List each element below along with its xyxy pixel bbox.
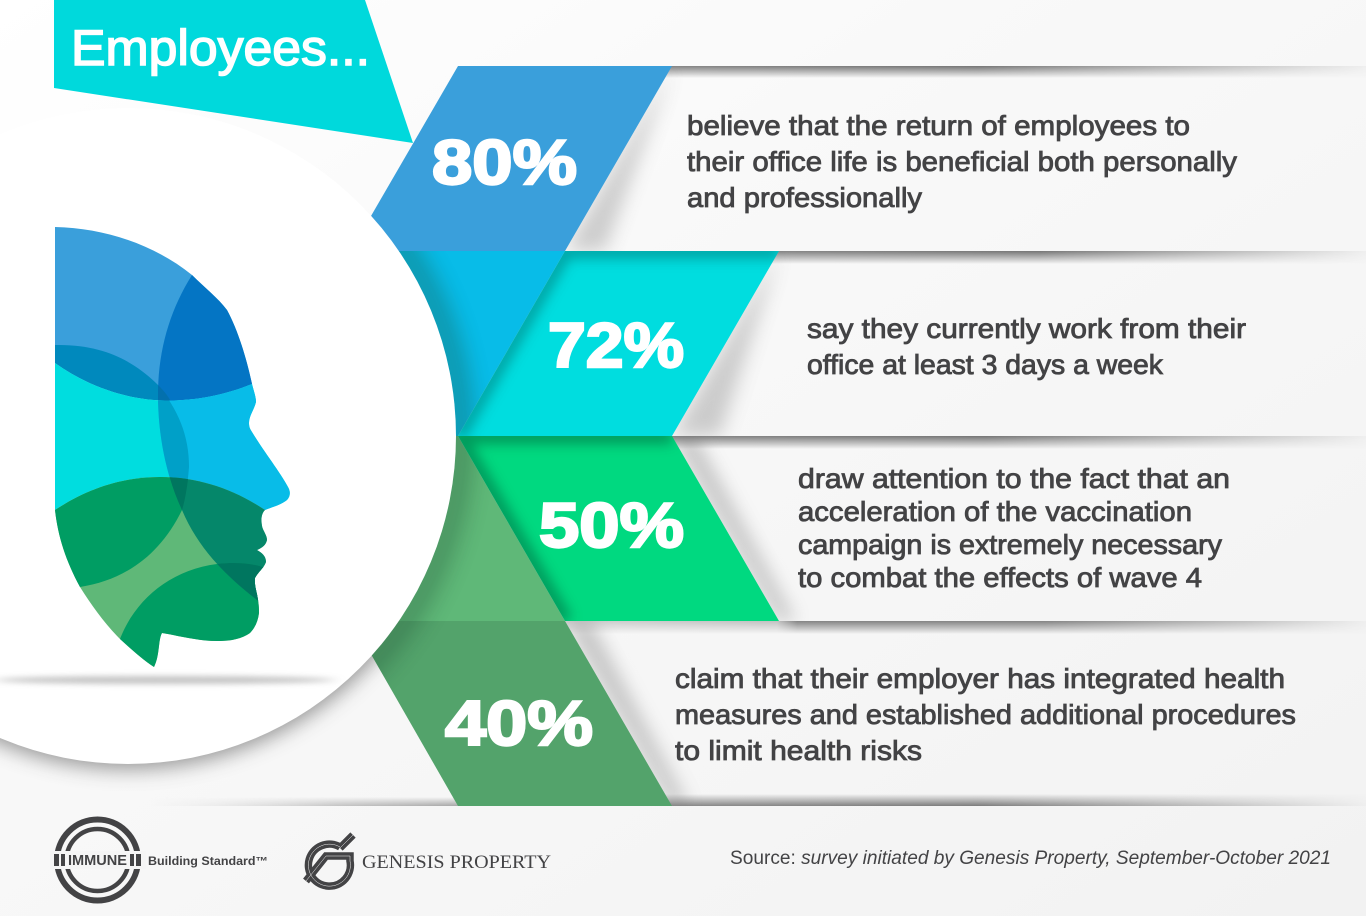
logo: Genesis Property: GENESIS PROPERTY [362, 852, 551, 873]
text: vaccination campaign: campaign is extremely necessary [798, 529, 1222, 560]
floor shadow below the head [0, 676, 335, 684]
text: work from office [807, 313, 1246, 380]
colored chevron shapes [352, 66, 779, 806]
text: vaccination campaign: acceleration of the vaccination [798, 496, 1192, 527]
item 40 percent [445, 663, 1296, 766]
logo: Genesis Property [306, 835, 551, 886]
item 80 percent [432, 110, 1237, 213]
text: vaccination campaign: draw attention to the fact that an [798, 463, 1230, 494]
text: health measures: claim that their employer has integrated health [675, 663, 1285, 694]
text: vaccination campaign: to combat the effects of wave 4 [798, 562, 1202, 593]
title text: Employees... [71, 20, 370, 76]
text: health measures: measures and established additional procedures [675, 699, 1296, 730]
text: return to office: their office life is beneficial both personally [687, 146, 1237, 177]
text: health measures [675, 663, 1296, 766]
text: return to office: and professionally [687, 182, 922, 213]
segment: 50 percent [458, 436, 779, 621]
logo: IMMUNE Building Standard [50, 820, 268, 900]
text: work from office: office at least 3 days a week [807, 349, 1164, 380]
band shadows [565, 66, 1366, 634]
text: return to office: believe that the return of employees to [687, 110, 1190, 141]
inner shading of chevrons [0, 104, 779, 806]
left footer line shadow [199, 798, 458, 806]
item 72 percent [548, 311, 1246, 381]
value 80%: 80% [432, 128, 577, 198]
logo: IMMUNE Building Standard: Building Standard™ [148, 856, 268, 868]
item 50 percent [539, 463, 1230, 593]
segment: light green connector [352, 436, 565, 621]
icon: head silhouette [55, 227, 290, 667]
value 72%: 72% [548, 311, 684, 381]
bottom shadow above footer [666, 795, 1351, 806]
white circle [0, 108, 456, 764]
text: vaccination campaign [798, 463, 1230, 593]
segment: sky blue connector [380, 251, 565, 436]
floating title panel [54, 0, 413, 143]
chevron cast shadows [565, 66, 795, 806]
text: health measures: to limit health risks [675, 735, 922, 766]
text: work from office: say they currently work from their [807, 313, 1246, 344]
logo: IMMUNE Building Standard: IMMUNE [68, 853, 127, 869]
segment: 80 percent [371, 66, 672, 251]
segment: 40 percent [352, 621, 672, 806]
source note: Source: survey initiated by Genesis Property, September-October 2021 [730, 848, 1331, 869]
circle shadow on the background [0, 656, 380, 782]
value 50%: 50% [539, 491, 684, 561]
value 40%: 40% [445, 689, 593, 759]
segment: 72 percent [458, 251, 779, 436]
text: return to office [687, 110, 1237, 213]
